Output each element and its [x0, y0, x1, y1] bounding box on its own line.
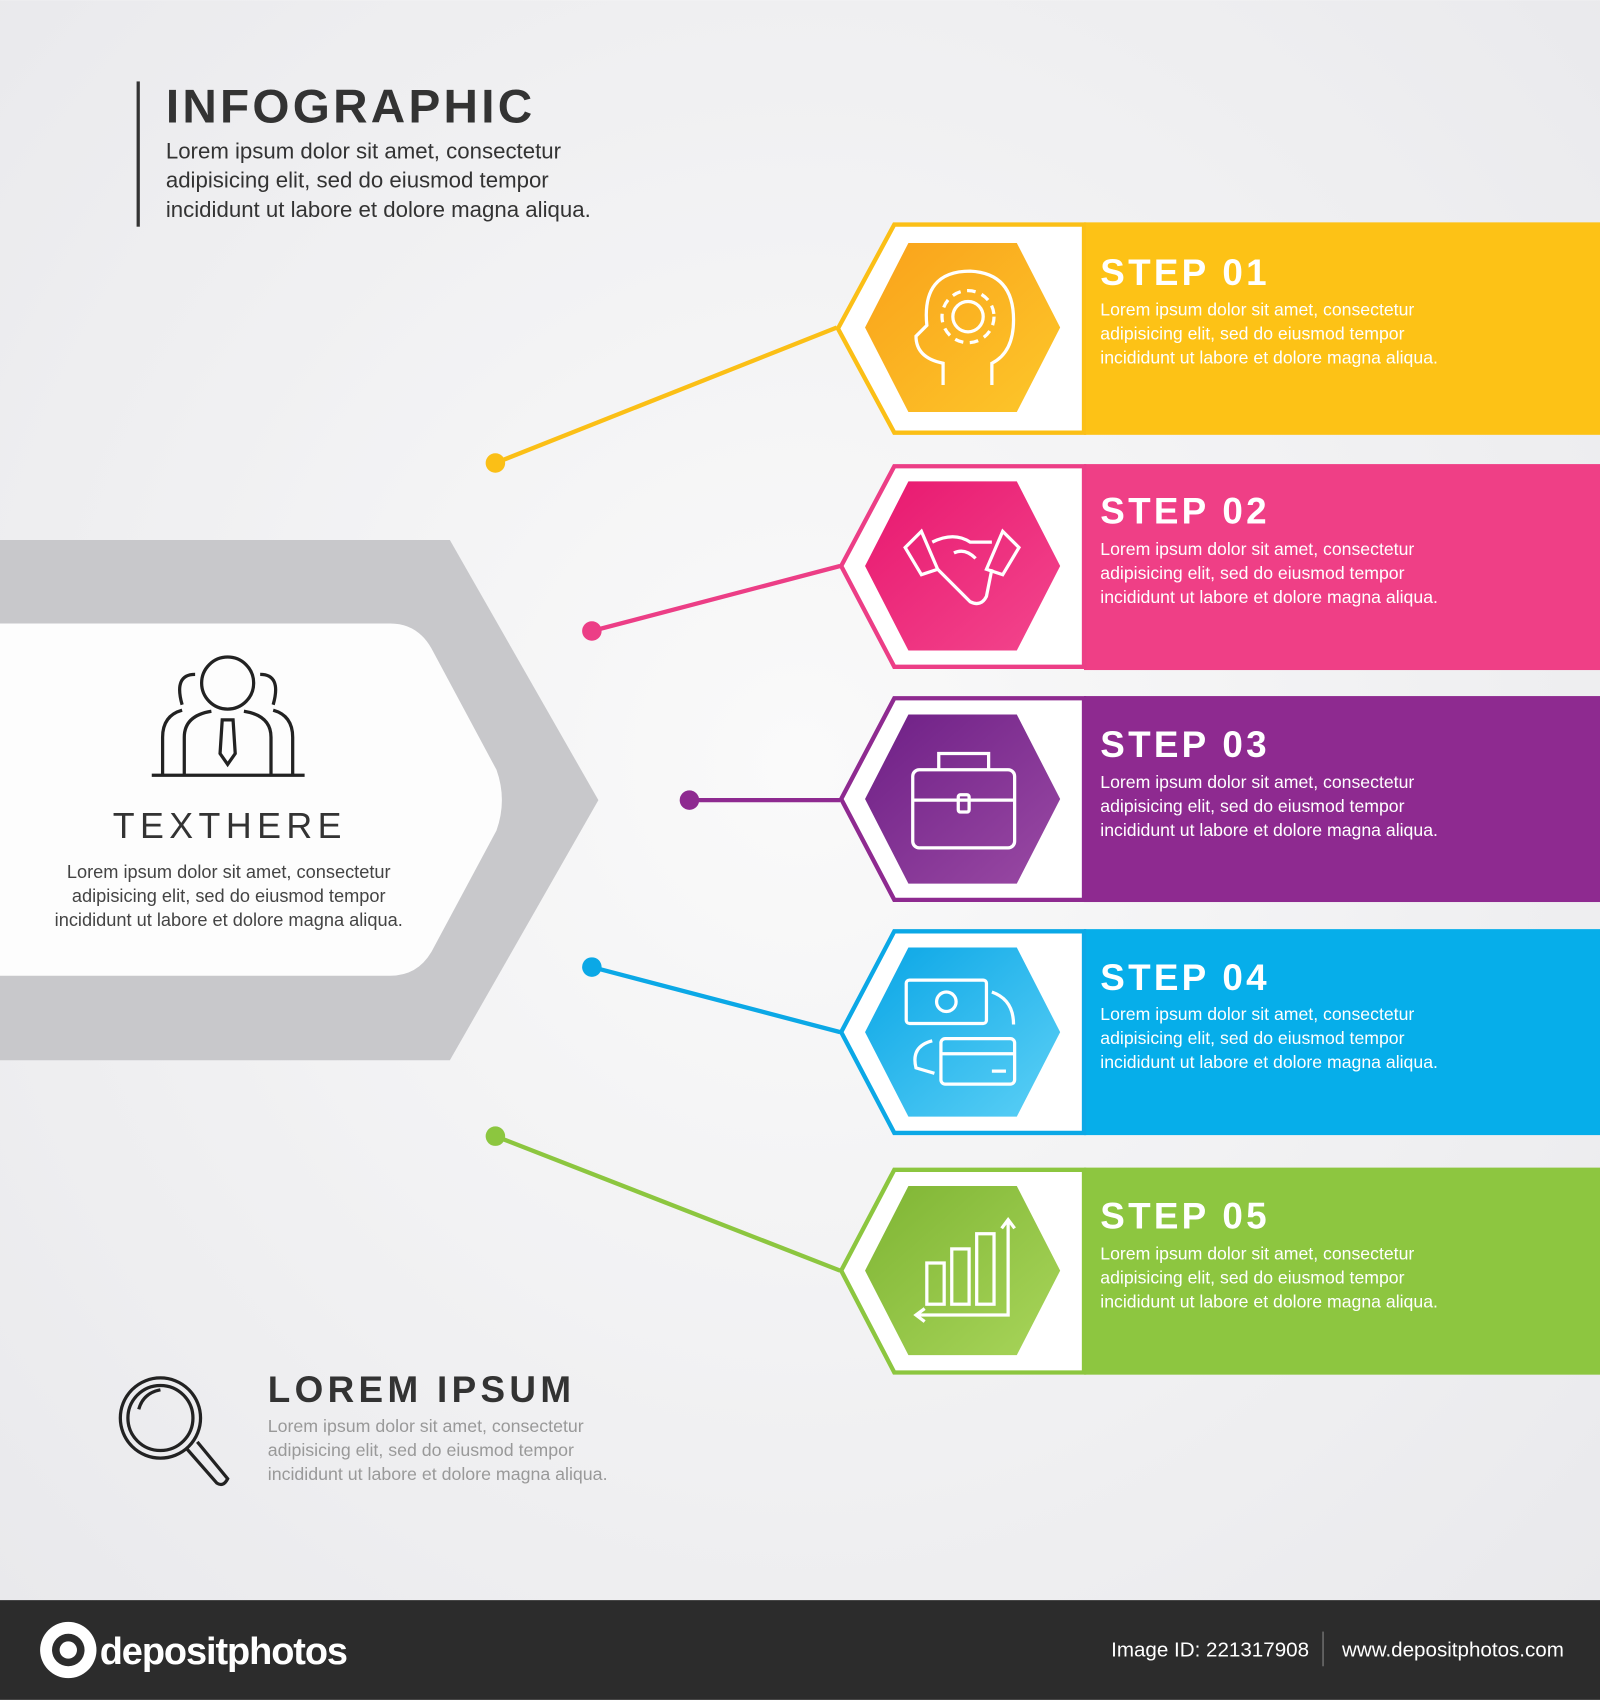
icon: team: [152, 657, 305, 775]
lorem ipsum block: [268, 1369, 608, 1484]
step 05: STEP 05: [1100, 1195, 1270, 1236]
step 02: [582, 464, 1600, 670]
lorem ipsum block: incididunt ut labore et dolore magna aliqua.: [268, 1464, 608, 1484]
step 02: STEP 02: [1100, 491, 1270, 532]
step 02: incididunt ut labore et dolore magna aliqua.: [1100, 587, 1438, 607]
step 03: adipisicing elit, sed do eiusmod tempor: [1100, 796, 1405, 816]
step 05: [486, 1126, 1600, 1375]
step 01: [486, 222, 1600, 473]
step 04: STEP 04: [1100, 957, 1270, 998]
step 03: STEP 03: [1100, 724, 1270, 765]
title block: INFOGRAPHIC: [166, 81, 535, 134]
step 05: incididunt ut labore et dolore magna aliqua.: [1100, 1291, 1438, 1311]
step 01: adipisicing elit, sed do eiusmod tempor: [1100, 323, 1405, 343]
title block: incididunt ut labore et dolore magna aliqua.: [166, 197, 591, 222]
icon: magnifier: [120, 1378, 228, 1485]
step 03: [680, 696, 1600, 902]
step 01: STEP 01: [1100, 252, 1270, 293]
footer: [0, 1600, 1600, 1700]
footer: www.depositphotos.com: [1341, 1639, 1564, 1662]
lorem ipsum block: LOREM IPSUM: [268, 1369, 575, 1410]
step 01: Lorem ipsum dolor sit amet, consectetur: [1100, 300, 1414, 320]
step 01: incididunt ut labore et dolore magna aliqua.: [1100, 347, 1438, 367]
step 02: adipisicing elit, sed do eiusmod tempor: [1100, 563, 1405, 583]
title block: Lorem ipsum dolor sit amet, consectetur: [166, 138, 562, 163]
central panel: incididunt ut labore et dolore magna aliqua.: [55, 910, 403, 930]
step 02: Lorem ipsum dolor sit amet, consectetur: [1100, 539, 1414, 559]
central panel: adipisicing elit, sed do eiusmod tempor: [72, 886, 386, 906]
step 05: Lorem ipsum dolor sit amet, consectetur: [1100, 1244, 1414, 1264]
central panel: [0, 540, 598, 1060]
central panel: TEXTHERE: [113, 806, 347, 846]
step 03: Lorem ipsum dolor sit amet, consectetur: [1100, 772, 1414, 792]
step 04: adipisicing elit, sed do eiusmod tempor: [1100, 1028, 1405, 1048]
title block: adipisicing elit, sed do eiusmod tempor: [166, 168, 549, 193]
step 04: [582, 929, 1600, 1135]
lorem ipsum block: Lorem ipsum dolor sit amet, consectetur: [268, 1416, 584, 1436]
footer: Image ID: 221317908: [1111, 1639, 1309, 1662]
footer: depositphotos: [100, 1631, 347, 1673]
step 04: Lorem ipsum dolor sit amet, consectetur: [1100, 1004, 1414, 1024]
lorem ipsum block: adipisicing elit, sed do eiusmod tempor: [268, 1440, 574, 1460]
step 03: incididunt ut labore et dolore magna aliqua.: [1100, 820, 1438, 840]
step 05: adipisicing elit, sed do eiusmod tempor: [1100, 1268, 1405, 1288]
step 04: incididunt ut labore et dolore magna aliqua.: [1100, 1052, 1438, 1072]
title block: [137, 81, 591, 227]
central panel: Lorem ipsum dolor sit amet, consectetur: [67, 862, 391, 882]
